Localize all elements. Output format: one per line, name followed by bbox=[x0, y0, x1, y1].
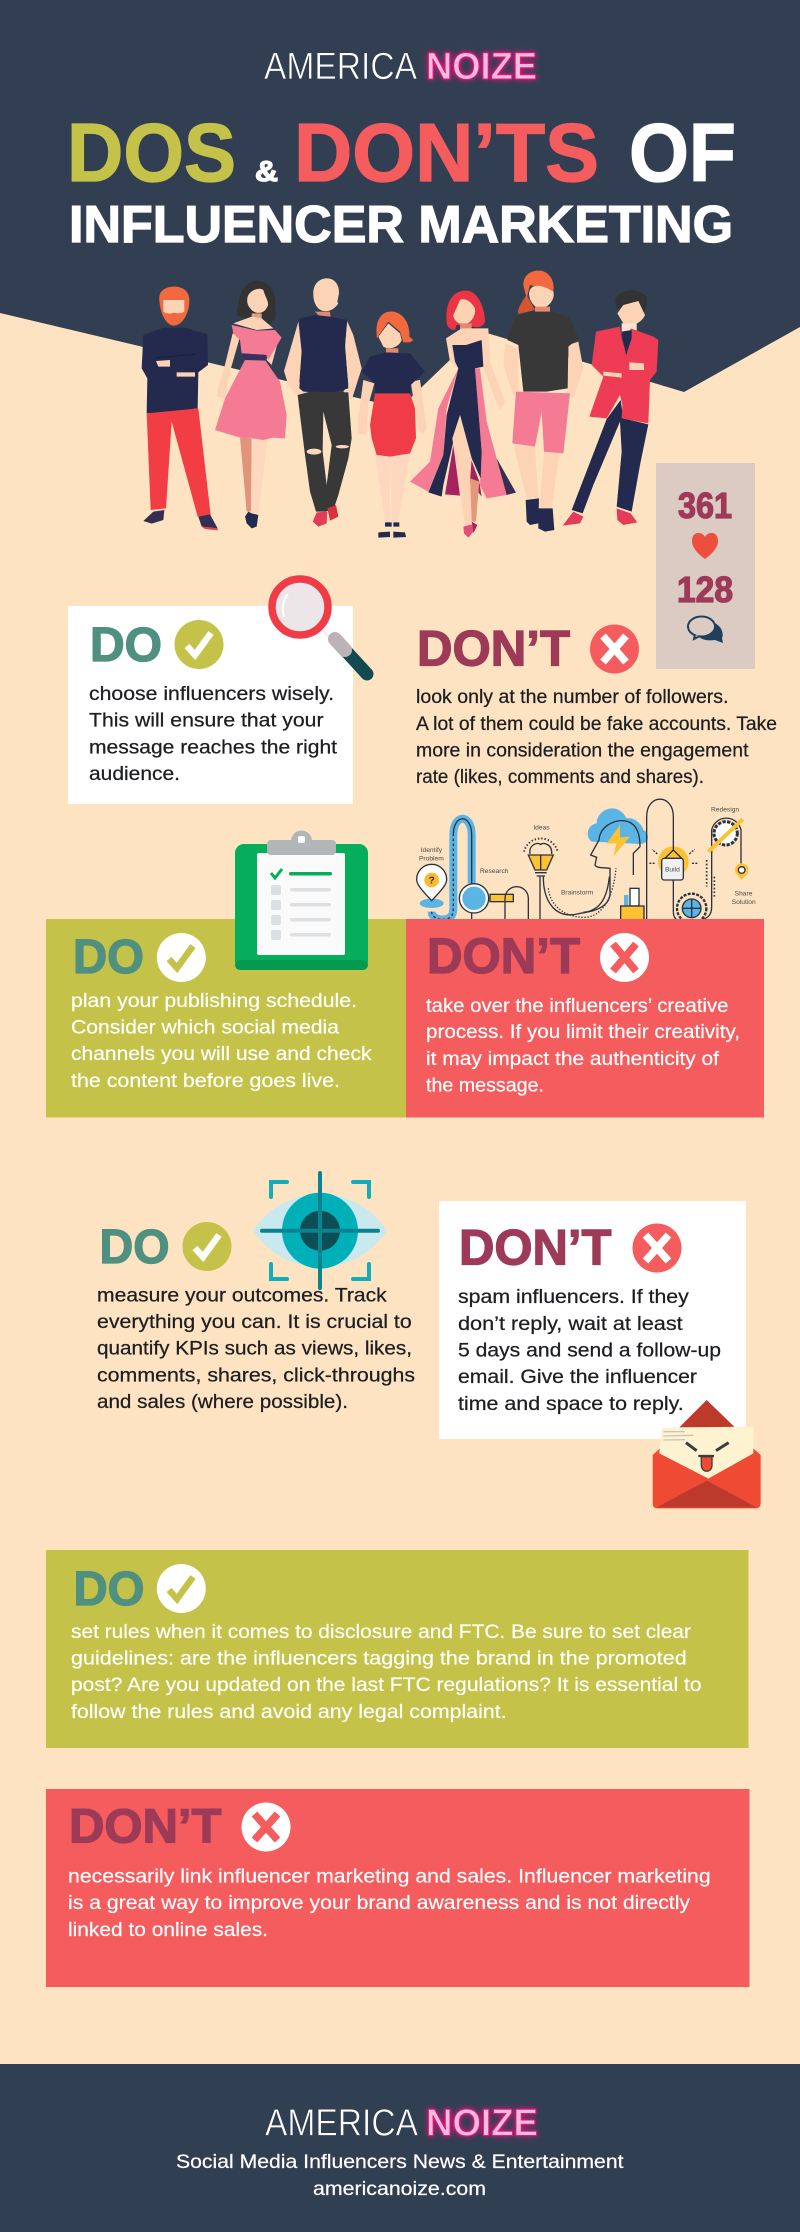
heading: don't: DON’T bbox=[459, 1220, 612, 1276]
process labels: Problem bbox=[419, 855, 444, 862]
panel: don't spam influencers bbox=[439, 1201, 746, 1439]
panel: engagement counters bbox=[656, 463, 755, 669]
heading: do: DO bbox=[90, 619, 162, 672]
process labels: Solution bbox=[732, 899, 756, 906]
icon: cross bbox=[590, 624, 639, 674]
text block: marketing and sales: necessarily link influencer marketing and sales. Influencer marketing bbox=[68, 1865, 711, 1887]
icon: angry envelope bbox=[653, 1400, 761, 1508]
title: OF bbox=[629, 106, 736, 199]
logo: America Noize bbox=[264, 46, 537, 88]
icon: check bbox=[157, 1564, 206, 1613]
text block: marketing and sales bbox=[68, 1865, 711, 1941]
icon: pencil cup bbox=[621, 888, 644, 921]
text block: followers: more in consideration the engagement bbox=[416, 740, 749, 762]
text block: measure outcomes: everything you can. It is crucial to bbox=[97, 1311, 412, 1333]
icon: heart bbox=[692, 533, 718, 559]
footer website: americanoize.com bbox=[313, 2178, 486, 2200]
text block: set rules bbox=[71, 1621, 702, 1723]
icon: problem pin: ? bbox=[429, 876, 435, 887]
footer bbox=[0, 2064, 800, 2232]
logo: America Noize: NOIZE bbox=[426, 46, 537, 88]
text block: spam influencers bbox=[458, 1286, 721, 1415]
heading: don't: DON’T bbox=[417, 620, 570, 676]
text block: creative process: process. If you limit their creativity, bbox=[426, 1021, 740, 1043]
heading: do: DO bbox=[100, 1221, 170, 1274]
icon: brainstorm head in cloud bbox=[583, 808, 648, 912]
blue tube bbox=[432, 819, 472, 919]
heading: do: DO bbox=[74, 1563, 144, 1616]
heading: don't: DON’T bbox=[69, 1800, 222, 1854]
process labels: Research bbox=[480, 868, 509, 875]
counter: likes 361: 361 bbox=[678, 485, 732, 526]
icon: eye target bbox=[253, 1173, 387, 1288]
icon: magnifying glass bbox=[272, 579, 367, 674]
process labels: Build bbox=[665, 867, 680, 874]
process labels: Ideas bbox=[533, 825, 550, 832]
text block: spam influencers: email. Give the influencer bbox=[458, 1366, 698, 1388]
text block: spam influencers: 5 days and send a follow-up bbox=[458, 1340, 721, 1362]
text block: set rules: follow the rules and avoid any legal complaint. bbox=[71, 1701, 507, 1723]
icon: redesign gear and pencil bbox=[708, 818, 743, 863]
text block: spam influencers: time and space to reply. bbox=[458, 1393, 684, 1415]
text block: choose influencers: audience. bbox=[89, 763, 180, 785]
text block: plan publishing: Consider which social media bbox=[71, 1016, 339, 1038]
panel: do plan publishing bbox=[46, 919, 406, 1118]
person: man in t-shirt and pink shorts bbox=[503, 271, 583, 532]
process labels: Redesign bbox=[711, 806, 739, 813]
panel: don't take over creative process bbox=[406, 919, 764, 1118]
panel: don't link marketing and sales bbox=[46, 1789, 750, 1987]
text block: spam influencers: don’t reply, wait at least bbox=[458, 1313, 683, 1335]
illustration: group of influencers right bbox=[358, 271, 658, 538]
text block: measure outcomes: measure your outcomes. Track bbox=[97, 1284, 387, 1306]
text block: marketing and sales: is a great way to improve your brand awareness and is not directly bbox=[68, 1892, 690, 1914]
icon: research magnifier bbox=[459, 884, 513, 913]
icon: build box bbox=[647, 799, 712, 921]
illustration: group of influencers left bbox=[142, 278, 362, 530]
person: bearded man bbox=[142, 287, 218, 530]
title: & bbox=[255, 156, 278, 188]
heading: do: DO bbox=[73, 931, 144, 984]
text block: creative process: the message. bbox=[426, 1074, 544, 1096]
text block: plan publishing: plan your publishing schedule. bbox=[71, 990, 357, 1012]
text block: measure outcomes: comments, shares, click-throughs bbox=[97, 1364, 415, 1386]
icon: check bbox=[174, 620, 224, 669]
text block: followers bbox=[416, 686, 777, 788]
icon: globe gear bbox=[677, 894, 706, 923]
icon: clipboard bbox=[235, 830, 368, 970]
process labels: Share bbox=[735, 890, 753, 897]
title: INFLUENCER MARKETING bbox=[69, 196, 733, 254]
text block: plan publishing: channels you will use and check bbox=[71, 1043, 372, 1065]
person: short woman in red skirt bbox=[358, 311, 427, 538]
text block: choose influencers: This will ensure that your bbox=[89, 710, 324, 732]
text block: measure outcomes bbox=[97, 1284, 415, 1413]
text block: creative process bbox=[426, 995, 740, 1096]
icon: check bbox=[182, 1222, 232, 1271]
text block: creative process: take over the influencers’ creative bbox=[426, 995, 728, 1017]
icon: cross bbox=[600, 933, 649, 982]
logo: America Noize footer bbox=[265, 2102, 538, 2144]
logo: America Noize footer: AMERICA bbox=[265, 2102, 419, 2144]
icon: ideas bulb bbox=[524, 838, 558, 876]
connecting lines bbox=[472, 877, 609, 920]
panel: do choose influencers bbox=[68, 606, 353, 804]
icon: cross bbox=[632, 1224, 682, 1272]
panel: don't look only at followers bbox=[416, 620, 777, 788]
logo: America Noize: AMERICA bbox=[264, 46, 418, 88]
text block: measure outcomes: and sales (where possible). bbox=[97, 1391, 348, 1413]
process labels bbox=[419, 806, 756, 906]
heading: don't: DON’T bbox=[427, 928, 580, 984]
person: bald man in black jeans bbox=[284, 278, 362, 527]
text block: followers: A lot of them could be fake accounts. Take bbox=[416, 713, 777, 735]
logo: America Noize footer: NOIZE bbox=[426, 2102, 538, 2144]
text block: set rules: guidelines: are the influencers tagging the brand in the promoted bbox=[71, 1647, 687, 1669]
process labels: Brainstorm bbox=[561, 889, 594, 896]
text block: marketing and sales: linked to online sales. bbox=[68, 1919, 268, 1941]
process labels: Identify bbox=[421, 847, 443, 854]
text block: spam influencers: spam influencers. If they bbox=[458, 1286, 689, 1308]
person: man in red jacket bbox=[563, 290, 658, 526]
text block: followers: rate (likes, comments and shares). bbox=[416, 766, 704, 788]
text block: followers: look only at the number of followers. bbox=[416, 686, 728, 708]
text block: choose influencers bbox=[89, 683, 338, 785]
panel: do set rules bbox=[46, 1550, 748, 1748]
icon: cross bbox=[242, 1802, 290, 1852]
icon: speech bubbles bbox=[688, 616, 723, 643]
title bbox=[67, 106, 736, 254]
text block: set rules: post? Are you updated on the last FTC regulations? It is essential to bbox=[71, 1674, 702, 1696]
icon: check bbox=[157, 933, 206, 982]
header navy shape bbox=[0, 0, 800, 408]
counter: comments 128: 128 bbox=[677, 569, 733, 610]
text block: measure outcomes: quantify KPIs such as views, likes, bbox=[97, 1338, 412, 1360]
text block: set rules: set rules when it comes to disclosure and FTC. Be sure to set clear bbox=[71, 1621, 692, 1643]
text block: choose influencers: message reaches the right bbox=[89, 736, 338, 758]
title: DOS bbox=[67, 106, 236, 199]
panel: do measure outcomes bbox=[97, 1221, 415, 1413]
illustration: creative process line art bbox=[417, 799, 756, 923]
text block: plan publishing bbox=[71, 990, 372, 1092]
footer tagline: Social Media Influencers News & Entertainment bbox=[176, 2151, 624, 2173]
text block: plan publishing: the content before goes live. bbox=[71, 1070, 340, 1092]
text block: creative process: it may impact the authenticity of bbox=[426, 1048, 720, 1070]
person: woman in gown bbox=[410, 291, 516, 538]
icon: problem pin bbox=[417, 864, 447, 908]
title: DON’TS bbox=[294, 106, 599, 199]
icon: share pin bbox=[735, 863, 748, 880]
text block: choose influencers: choose influencers wisely. bbox=[89, 683, 334, 705]
person: woman in pink dress bbox=[215, 281, 287, 528]
